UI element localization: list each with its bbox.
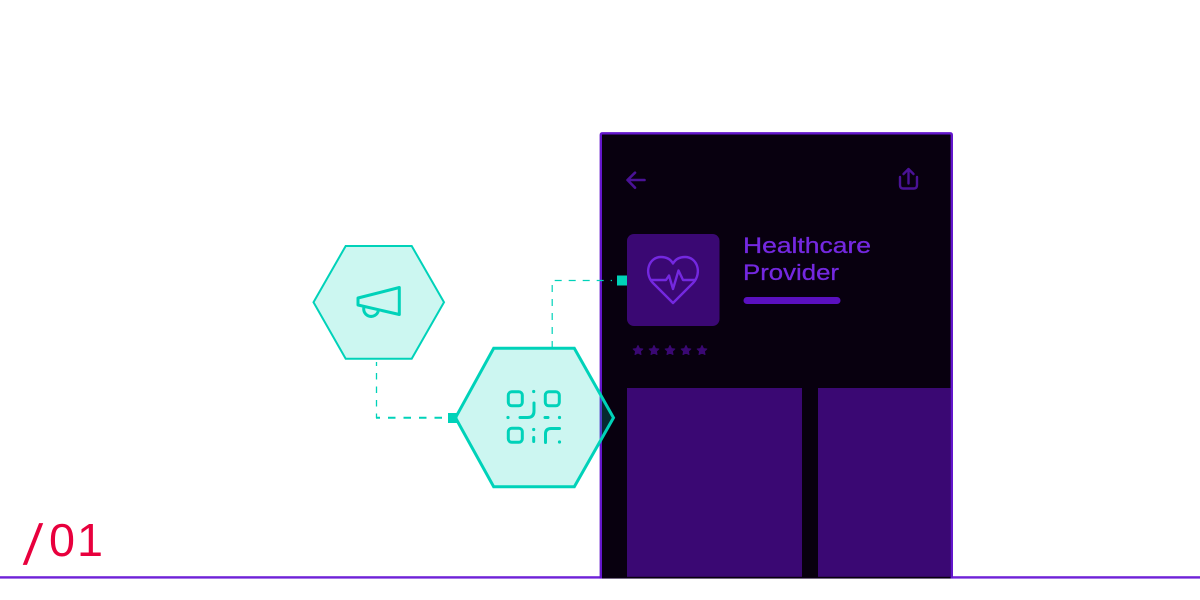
icon: heart with pulse [648, 257, 698, 303]
connector node: QR hexagon [448, 413, 458, 423]
screenshot placeholder right [818, 388, 951, 577]
slide number: 1 [77, 514, 103, 566]
heading: Healthcare Provider: Provider [743, 260, 839, 285]
heading: Healthcare Provider [743, 233, 871, 285]
rating stars [633, 346, 707, 354]
heading: Healthcare Provider: Healthcare [743, 233, 871, 258]
connector: QR to app tile [552, 280, 612, 348]
icon: back arrow [628, 173, 644, 188]
hexagon: QR code [456, 348, 614, 487]
connector: megaphone to QR, horizontal [376, 417, 450, 419]
slide number: / [21, 517, 45, 581]
app icon tile [627, 234, 720, 326]
connector node: app tile [617, 276, 627, 286]
panel: phone screen [601, 133, 952, 579]
screenshot placeholder left [627, 388, 802, 577]
slide number: 0 [49, 514, 75, 566]
connector: megaphone to QR, vertical [376, 362, 378, 418]
placeholder bar [744, 297, 840, 304]
slide number [21, 514, 103, 581]
icon: megaphone [358, 288, 399, 316]
icon: share [900, 169, 917, 188]
baseline rule [0, 576, 1200, 579]
icon: QR code [506, 390, 561, 444]
hexagon: megaphone [314, 246, 444, 359]
